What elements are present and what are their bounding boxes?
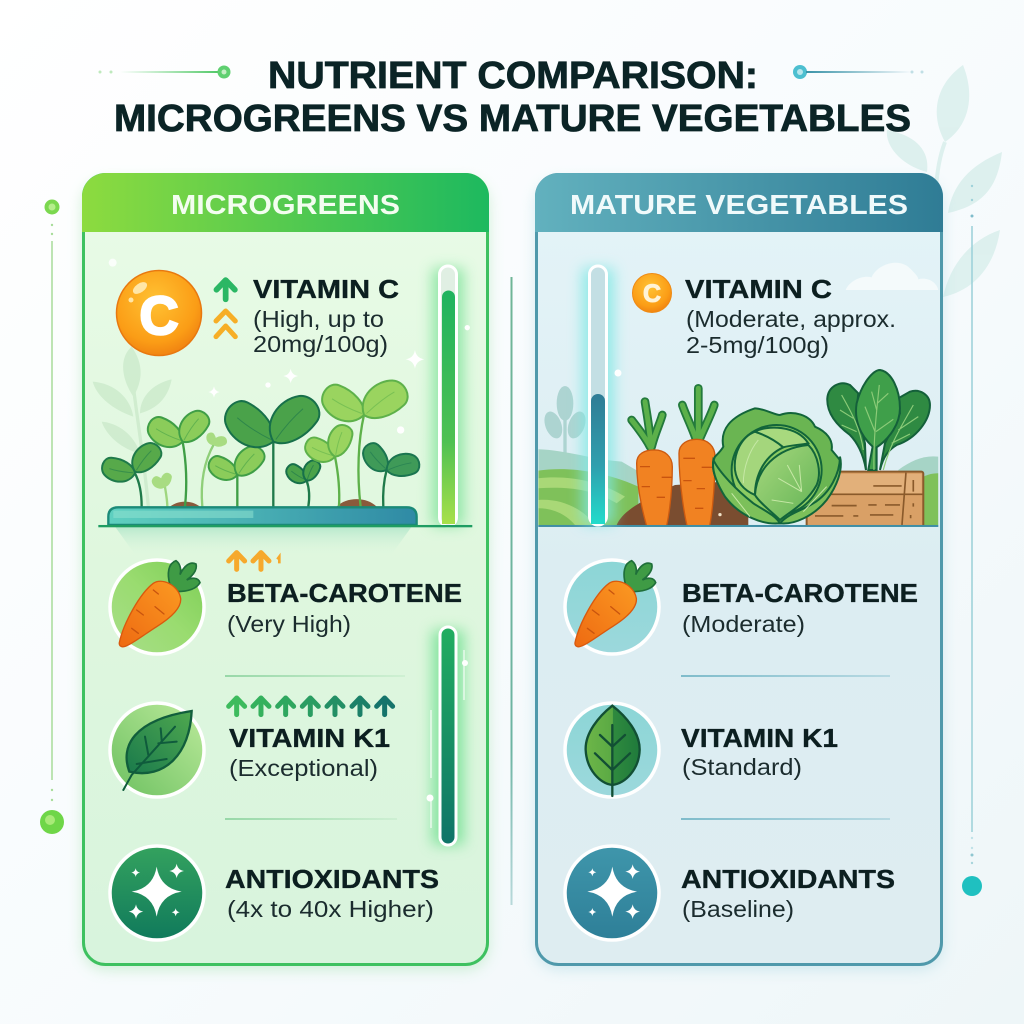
title decoration right [793,65,924,79]
vitamin K1 row [110,698,393,797]
cloud [846,263,938,290]
mature vegetables header: MATURE VEGETABLES [570,189,908,220]
antioxidants text: (Baseline) [682,896,794,922]
vitamin C text: VITAMIN C [685,274,832,304]
vitamin K1 text [681,723,838,780]
vitamin K1 arrows [229,698,393,715]
vitamin K1 text [229,723,390,781]
beta-carotene text: (Moderate) [682,611,805,637]
vitamin K1 text: (Standard) [682,754,802,780]
beta-carotene text: BETA-CAROTENE [682,578,918,608]
beta-carotene text: BETA-CAROTENE [227,578,462,608]
vitamin C text: VITAMIN C [253,274,399,304]
vitamin C arrows [216,280,235,337]
decorative background plant top right [887,65,1002,297]
beta-carotene text: (Very High) [227,611,351,637]
vitamin C orb [632,274,672,312]
vitamin C text: 2-5mg/100g) [686,332,829,358]
antioxidants text: (4x to 40x Higher) [227,896,434,922]
cabbage [713,408,841,524]
vitamin C text: 20mg/100g) [253,331,388,357]
vitamin C text [685,274,896,358]
background ghost plant [93,347,172,507]
antioxidants text [225,864,439,922]
antioxidants icon [565,846,659,940]
vitamin C text [253,274,399,357]
vitamin K1 row [565,703,838,797]
antioxidants icon [110,846,204,940]
tray [98,507,472,557]
carrots [632,388,715,535]
title: MICROGREENS VS MATURE VEGETABLES [114,98,911,140]
title: NUTRIENT COMPARISON: [268,55,758,97]
beta-carotene arrows [229,553,279,569]
vitamin C orb: C [643,280,661,308]
title decoration left [98,66,230,78]
panel: mature vegetables [535,173,943,970]
microgreens header: MICROGREENS [171,189,400,220]
hills and fields [538,449,640,504]
vegetables illustration [538,263,938,535]
right side decorative nodes [962,185,982,896]
spinach [827,370,930,470]
vitamin C text: (Moderate, approx. [686,306,896,332]
title [114,55,911,140]
ghost tree [544,386,586,452]
vitamin K1 text: (Exceptional) [229,755,378,781]
vitamin C orb [116,270,202,356]
vitamin K1 text: VITAMIN K1 [229,723,390,753]
center decorative line [510,277,512,905]
beta-carotene row [565,560,918,654]
vitamin K1 icon [565,703,659,797]
sprout leaves [99,373,421,490]
microgreens header [82,173,489,232]
beta-carotene row [110,553,462,654]
beta-carotene text [682,578,918,637]
sparkles [109,259,470,434]
vitamin C orb: C [140,286,178,346]
soil [617,480,748,525]
beta-carotene icon [110,560,204,654]
lower level bar [426,627,468,845]
vitamin K1 icon [110,703,204,797]
vitamin C level bar [582,266,622,525]
beta-carotene icon [565,560,659,654]
antioxidants text: ANTIOXIDANTS [225,864,439,894]
left side decorative nodes [40,200,64,834]
vitamin C text: (High, up to [253,306,384,332]
antioxidants row [565,846,895,940]
beta-carotene text [227,578,462,637]
sprouts [135,415,387,507]
panel: microgreens [82,173,489,970]
crate [807,472,923,528]
antioxidants text: ANTIOXIDANTS [681,864,895,894]
mature vegetables header [535,173,943,232]
microgreens illustration [93,259,472,557]
antioxidants text [681,864,895,922]
vitamin C level bar [432,266,464,526]
vitamin K1 text: VITAMIN K1 [681,723,838,753]
soil mounds [170,499,377,507]
antioxidants row [110,846,439,940]
